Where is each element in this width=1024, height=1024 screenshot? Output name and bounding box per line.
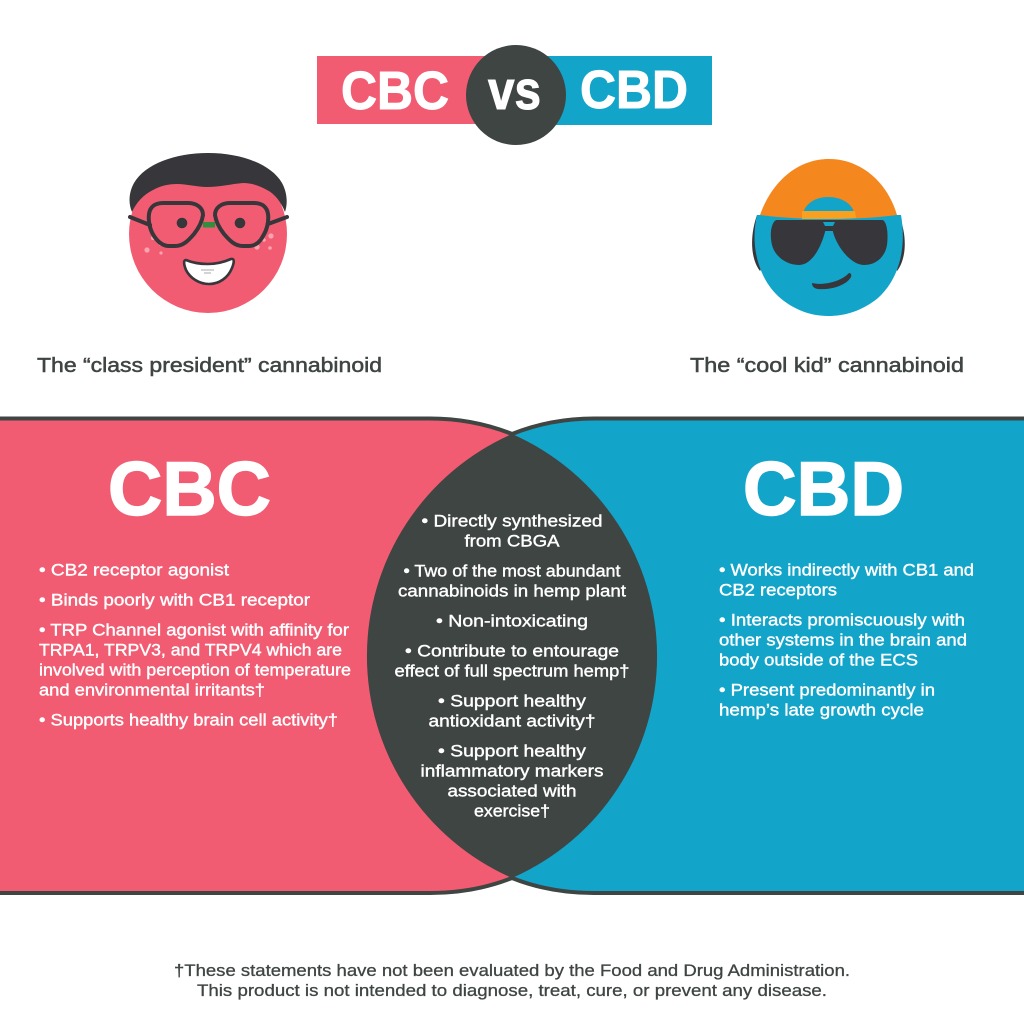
title banner: CBC vs CBD — [317, 45, 712, 145]
shared bullet list: cannabinoids in hemp plant — [398, 582, 626, 600]
CBD bullet list: • Works indirectly with CB1 and — [719, 560, 974, 580]
panel: CBD — [512, 418, 1024, 893]
CBD bullet list: other systems in the brain and — [719, 630, 967, 650]
icon: CBD cool face — [752, 159, 905, 316]
CBD bullet list — [719, 560, 974, 720]
shared bullet list: • Directly synthesized — [422, 512, 602, 530]
icon: CBC nerd face — [129, 153, 287, 313]
shared bullet list: exercise† — [474, 802, 550, 820]
CBC bullet list: involved with perception of temperature — [39, 660, 351, 680]
CBD bullet list: hemp’s late growth cycle — [719, 700, 924, 720]
panel: shared overlap — [367, 434, 657, 878]
title banner: CBC vs CBD: CBD — [580, 60, 688, 120]
shared bullet list: • Contribute to entourage — [405, 642, 619, 660]
shared bullet list: • Non-intoxicating — [436, 612, 588, 630]
CBC bullet list: • Supports healthy brain cell activity† — [39, 710, 338, 730]
panel: CBC — [0, 418, 512, 893]
footnote: This product is not intended to diagnose, treat, cure, or prevent any disease. — [197, 981, 827, 1000]
caption: CBD: The “cool kid” cannabinoid — [690, 355, 964, 377]
shared bullet list — [394, 512, 630, 820]
shared bullet list: antioxidant activity† — [428, 712, 596, 730]
CBC bullet list — [39, 560, 351, 730]
title banner: CBC vs CBD: vs — [488, 59, 541, 121]
CBD bullet list: body outside of the ECS — [719, 650, 918, 670]
CBC bullet list: and environmental irritants† — [39, 680, 265, 700]
CBC bullet list: TRPA1, TRPV3, and TRPV4 which are — [39, 640, 342, 660]
CBD bullet list: • Present predominantly in — [719, 680, 935, 700]
shared bullet list: • Two of the most abundant — [404, 562, 621, 580]
shared bullet list: inflammatory markers — [420, 762, 604, 780]
CBD bullet list: • Interacts promiscuously with — [719, 610, 965, 630]
shared bullet list: effect of full spectrum hemp† — [394, 662, 630, 680]
CBC bullet list: • TRP Channel agonist with affinity for — [39, 620, 349, 640]
shared bullet list: from CBGA — [464, 532, 560, 550]
footnote: †These statements have not been evaluated by the Food and Drug Administration. — [174, 961, 850, 980]
CBC heading: CBC — [108, 447, 271, 532]
footnote — [174, 961, 850, 1000]
CBD heading: CBD — [743, 447, 904, 532]
title banner: CBC vs CBD: CBC — [341, 61, 449, 121]
CBC bullet list: • Binds poorly with CB1 receptor — [39, 590, 310, 610]
shared bullet list: • Support healthy — [438, 692, 587, 710]
shared bullet list: associated with — [448, 782, 576, 800]
shared bullet list: • Support healthy — [438, 742, 587, 760]
CBC bullet list: • CB2 receptor agonist — [39, 560, 229, 580]
CBD bullet list: CB2 receptors — [719, 580, 837, 600]
caption: CBC: The “class president” cannabinoid — [37, 355, 382, 377]
